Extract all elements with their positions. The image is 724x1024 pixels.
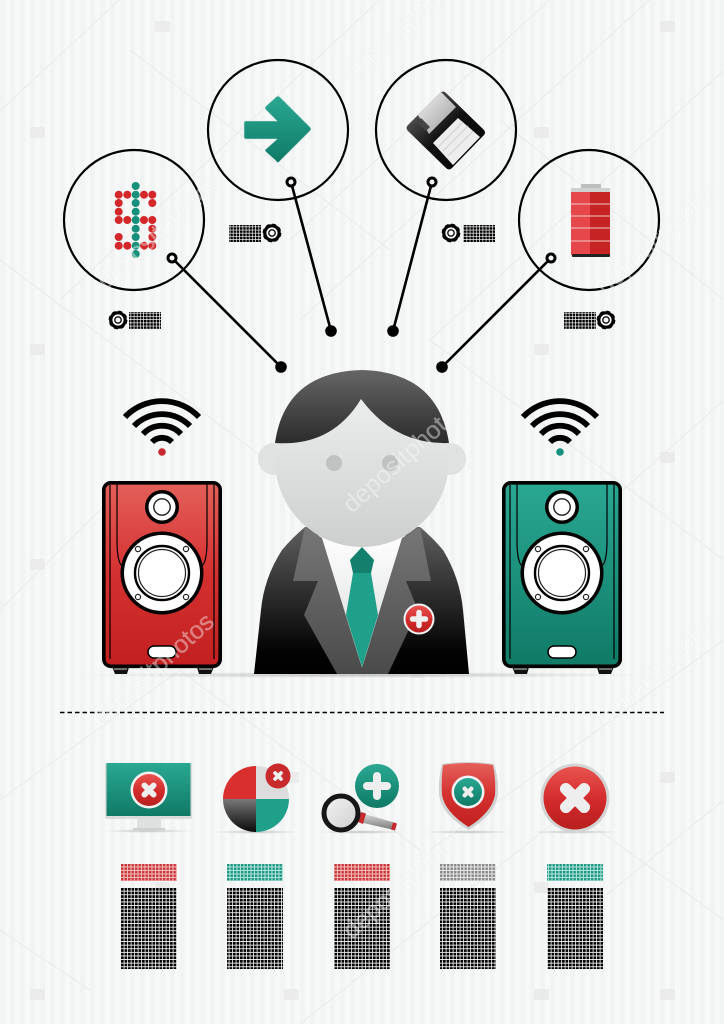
icon: magnifier plus: [318, 764, 406, 834]
icon: monitor: [104, 763, 192, 833]
watermarks: depositphotos: [591, 607, 724, 732]
placeholder text block 5: [547, 864, 603, 969]
label placeholder: floppy: [442, 224, 495, 242]
label placeholder: battery: [564, 311, 615, 329]
label placeholder: dollar: [109, 311, 161, 329]
circle callout: battery: [519, 150, 659, 290]
watermarks: depositphotos: [337, 393, 472, 518]
placeholder text block 2: [227, 864, 283, 969]
dashed divider: [60, 712, 664, 714]
circle callout: dollar: [64, 150, 204, 290]
icon: arrow: [244, 96, 311, 162]
face: [275, 373, 449, 547]
suit: [254, 527, 469, 674]
hair: [275, 370, 449, 443]
shirt: [318, 534, 406, 668]
icon: battery: [571, 184, 610, 257]
wifi icon left: [125, 401, 199, 456]
label placeholder: arrow: [229, 224, 281, 242]
placeholder text block 1: [121, 864, 177, 969]
lapels: [293, 527, 431, 674]
wifi icon right: [523, 401, 597, 456]
ears: [258, 443, 466, 475]
floor shadow: [77, 672, 647, 678]
eyes: [326, 455, 398, 471]
watermarks: depositphotos: [91, 169, 226, 294]
icon: dollar sign: [115, 182, 156, 258]
speaker red: [104, 483, 220, 674]
circle callout: floppy disk: [376, 60, 516, 200]
businessman: [254, 370, 469, 674]
badge: [404, 604, 434, 634]
watermarks: depositphotos: [337, 819, 472, 944]
watermarks: depositphotos: [591, 175, 724, 300]
placeholder text block 3: [334, 864, 390, 969]
icon: close button: [531, 764, 619, 834]
icon: pie chart: [212, 764, 300, 834]
speaker teal: [504, 483, 620, 674]
icon: floppy disk: [406, 92, 485, 170]
watermarks: depositphotos: [85, 607, 220, 732]
connector lines: [168, 178, 555, 373]
placeholder text block 4: [440, 864, 496, 969]
icon: shield: [424, 762, 512, 834]
tie: [346, 547, 378, 667]
circle callout: arrow: [208, 60, 348, 200]
